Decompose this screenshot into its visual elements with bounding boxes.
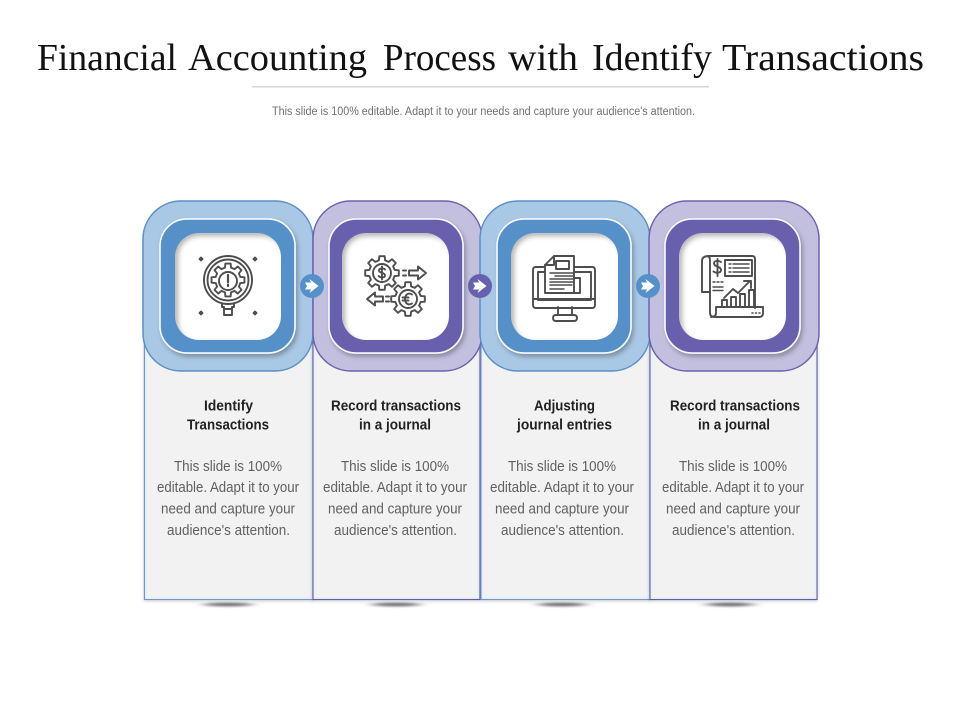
heading 1: Transactions: [187, 418, 269, 434]
body text 2: This slide is 100%: [341, 459, 449, 475]
tile 1: [143, 201, 313, 371]
tile 4: [649, 201, 819, 371]
title: Transactions: [722, 37, 924, 79]
text card 3: [481, 340, 650, 600]
body text 1: editable. Adapt it to your: [157, 480, 299, 496]
body text 2: audience's attention.: [334, 523, 457, 539]
floor shadows: [204, 602, 754, 606]
body text 3: [490, 459, 634, 539]
body text 3: This slide is 100%: [508, 459, 616, 475]
text card 4: [650, 340, 817, 600]
tile 2: [313, 201, 482, 371]
body text 1: This slide is 100%: [174, 459, 282, 475]
heading 3: [516, 398, 612, 434]
text card 2: [313, 340, 480, 600]
heading 4: Record transactions: [670, 398, 800, 414]
title: Accounting: [188, 37, 367, 79]
icon: monitor with document: [533, 256, 595, 321]
heading 4: in a journal: [698, 418, 770, 434]
arrow 2: [468, 274, 492, 298]
title: Process: [383, 37, 496, 79]
body text 3: need and capture your: [495, 502, 629, 518]
body text 4: need and capture your: [666, 502, 800, 518]
title: [37, 37, 924, 79]
heading 3: Adjusting: [534, 398, 595, 414]
text card 1: [144, 340, 313, 600]
heading 1: [187, 398, 269, 434]
panel: record transactions B: [650, 340, 817, 600]
panel: identify transactions: [144, 340, 313, 600]
heading 2: in a journal: [359, 418, 431, 434]
body text 3: editable. Adapt it to your: [490, 480, 634, 496]
heading 2: Record transactions: [331, 398, 461, 414]
heading 4: [670, 398, 800, 434]
icon: financial report scroll with chart: [702, 256, 763, 317]
body text 4: This slide is 100%: [679, 459, 787, 475]
heading 3: journal entries: [516, 418, 612, 434]
title: with: [508, 37, 578, 79]
heading 2: [331, 398, 461, 434]
subtitle: This slide is 100% editable. Adapt it to your needs and capture your audience's attention.: [272, 106, 695, 118]
body text 2: [323, 459, 467, 539]
body text 3: audience's attention.: [501, 523, 624, 539]
title: Identify: [592, 37, 713, 79]
arrow 3: [636, 274, 660, 298]
panel: record transactions A: [313, 340, 480, 600]
icon: magnifier with gear and alert: [200, 256, 256, 315]
panel: adjusting journal entries: [481, 340, 650, 600]
body text 1: audience's attention.: [167, 523, 290, 539]
body text 4: editable. Adapt it to your: [662, 480, 804, 496]
body text 4: audience's attention.: [672, 523, 795, 539]
body text 1: need and capture your: [161, 502, 295, 518]
body text 2: need and capture your: [328, 502, 462, 518]
body text 1: [157, 459, 299, 539]
icon: currency gears and arrows: [365, 256, 426, 316]
title: Financial: [37, 37, 177, 79]
body text 2: editable. Adapt it to your: [323, 480, 467, 496]
heading 1: Identify: [204, 398, 253, 414]
tile 3: [480, 201, 650, 371]
body text 4: [662, 459, 804, 539]
arrow 1: [300, 274, 324, 298]
